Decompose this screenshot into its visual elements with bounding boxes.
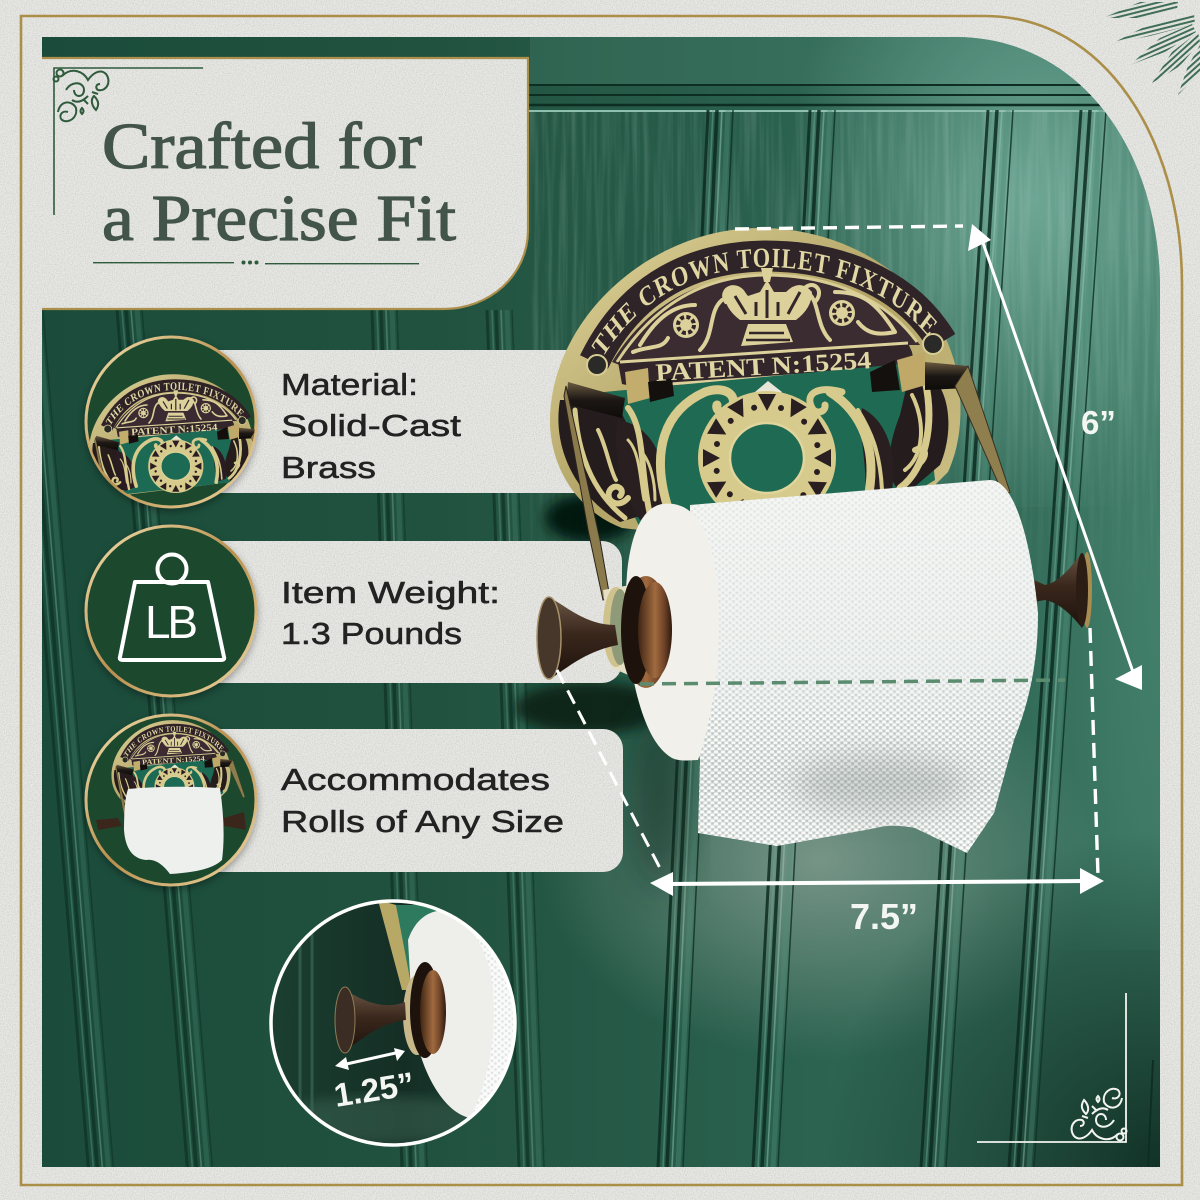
heading divider — [93, 260, 419, 264]
heading: a Precise Fit — [102, 182, 456, 255]
label: roll size: Accommodates — [281, 762, 550, 797]
label: weight: 1.3 Pounds — [281, 616, 462, 651]
header panel — [42, 58, 528, 309]
brass plate with inscription — [550, 228, 1010, 601]
dimension: depth guide line — [640, 680, 1065, 684]
dimension: 1.25 inch: 1.25” — [331, 1065, 417, 1114]
brass plate with inscription: PATENT N:15254 — [655, 347, 873, 387]
dimension: height 6 inch: 6” — [1081, 404, 1116, 441]
dimension: width 7.5 inch — [557, 628, 1104, 937]
decorative palm leaf — [1103, 2, 1200, 95]
holder and roll photo — [536, 224, 1098, 892]
icon: LB weight: LB — [145, 596, 198, 648]
dimension: width 7.5 inch: 7.5” — [850, 896, 918, 937]
feature card: weight — [130, 541, 622, 683]
label: roll size: Rolls of Any Size — [281, 804, 564, 839]
label: material: Brass — [281, 450, 376, 485]
label: material — [281, 367, 461, 485]
badge: roll thumbnail: PATENT N:15254 — [142, 755, 205, 766]
detail circle: knob close-up — [270, 900, 518, 1150]
left knob and flange — [537, 576, 672, 688]
feature card: material — [130, 350, 600, 493]
badge: material thumbnail: THE CROWN TOILET FIXTURE — [106, 382, 244, 425]
label: weight: Item Weight: — [281, 575, 500, 610]
label: weight — [281, 575, 500, 651]
label: material: Material: — [281, 367, 418, 402]
heading — [102, 110, 456, 255]
badge: weight icon — [86, 526, 256, 696]
label: material: Solid-Cast — [281, 408, 461, 443]
corner ornament bottom right — [977, 993, 1126, 1142]
toilet paper roll — [626, 480, 1038, 853]
label: roll size — [281, 762, 564, 839]
badge: roll thumbnail — [82, 714, 262, 892]
heading: Crafted for — [102, 110, 422, 183]
right knob — [1034, 552, 1092, 628]
badge: roll thumbnail: THE CROWN TOILET FIXTURE — [124, 726, 224, 757]
icon: LB weight — [120, 554, 224, 660]
dimension: height 6 inch — [735, 224, 1142, 690]
feature card: roll size — [130, 729, 623, 872]
badge: material thumbnail: PATENT N:15254 — [131, 422, 218, 438]
corner ornament top left — [54, 68, 203, 215]
badge: material thumbnail — [82, 336, 262, 514]
brass plate with inscription: THE CROWN TOILET FIXTURE — [591, 248, 938, 355]
